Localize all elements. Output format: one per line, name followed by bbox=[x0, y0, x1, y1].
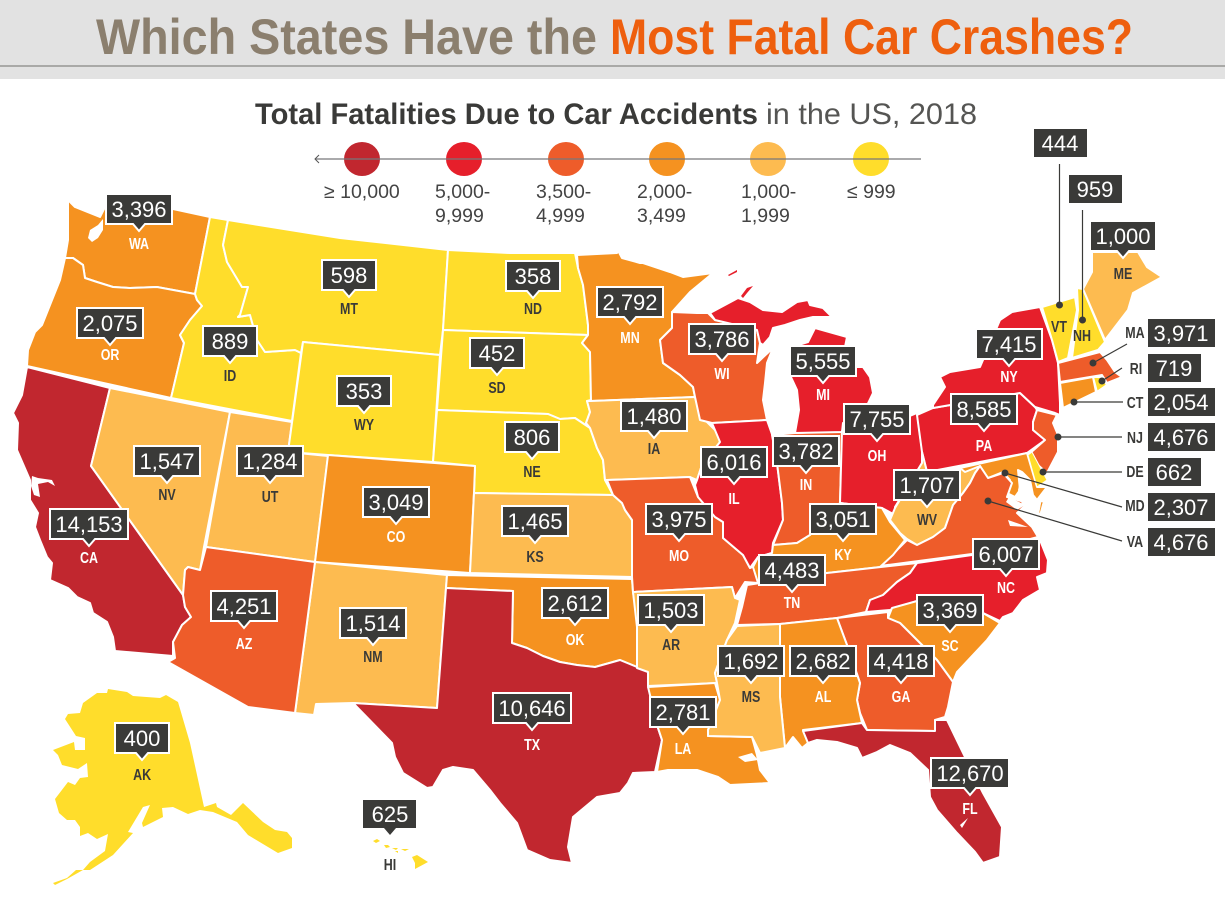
state: Michigan lower peninsula bbox=[790, 328, 873, 433]
state: New York bbox=[933, 307, 1060, 415]
callout: PA: 8,585 bbox=[956, 397, 1012, 422]
callout: HI: 625 bbox=[372, 802, 408, 827]
callout: AK bbox=[115, 723, 169, 784]
callout: NC: NC bbox=[997, 580, 1015, 597]
callout: FL: 12,670 bbox=[936, 761, 1004, 786]
callout: AR: 1,503 bbox=[643, 598, 699, 623]
callout: WA bbox=[106, 194, 172, 253]
state: Idaho bbox=[171, 217, 301, 421]
callout: LA bbox=[650, 697, 716, 758]
callout: IL: 6,016 bbox=[706, 450, 762, 475]
callout: UT: UT bbox=[262, 489, 279, 506]
callout: MS bbox=[718, 646, 784, 706]
callout: WY: WY bbox=[354, 417, 374, 434]
callout: VT: 444 bbox=[1042, 131, 1078, 156]
callout: ND bbox=[506, 261, 560, 318]
state: New Jersey bbox=[1028, 410, 1058, 473]
callout: MA: 3,971 bbox=[1153, 321, 1209, 346]
callout: VA: 4,676 bbox=[1153, 530, 1209, 555]
callout: NE: NE bbox=[523, 464, 541, 481]
callout: MO: MO bbox=[669, 548, 689, 565]
callout: WA: 3,396 bbox=[111, 197, 167, 222]
callout: DE: 662 bbox=[1156, 460, 1192, 485]
callout: MN bbox=[597, 287, 663, 347]
callout: NV: 1,547 bbox=[139, 449, 195, 474]
callout: HI: HI bbox=[384, 857, 396, 874]
callout: NJ: NJ bbox=[1127, 430, 1143, 447]
callout: MI bbox=[790, 346, 856, 404]
legend: 4,999 bbox=[536, 205, 585, 227]
callouts bbox=[50, 129, 1215, 874]
callout: ME: 1,000 bbox=[1095, 224, 1151, 249]
callout: AL bbox=[790, 646, 856, 706]
callout: NY bbox=[976, 329, 1042, 386]
callout: AL: 2,682 bbox=[795, 649, 851, 674]
state: Montana bbox=[223, 220, 448, 355]
callout: OK: OK bbox=[566, 632, 585, 649]
state: California bbox=[13, 367, 191, 656]
callout: AR: AR bbox=[662, 637, 681, 654]
state: Alabama bbox=[780, 618, 862, 748]
state: Tennessee bbox=[737, 563, 917, 625]
callout: OK: 2,612 bbox=[547, 591, 603, 616]
callout: KS: KS bbox=[526, 549, 544, 566]
subtitle: in the US, 2018 bbox=[766, 98, 977, 131]
callout: OR: OR bbox=[101, 347, 120, 364]
header band bbox=[0, 0, 1225, 79]
callout: OK bbox=[542, 588, 608, 649]
state: Pennsylvania bbox=[917, 393, 1045, 472]
callout: TN: TN bbox=[784, 595, 800, 612]
callout: AR bbox=[638, 595, 704, 654]
callout: DE bbox=[1040, 458, 1201, 486]
state: South Dakota bbox=[437, 330, 591, 428]
callout: NH: NH bbox=[1073, 328, 1091, 345]
callout: GA bbox=[868, 646, 934, 706]
state: Nebraska bbox=[433, 410, 613, 495]
callout: NM: 1,514 bbox=[345, 611, 401, 636]
callout: ID: ID bbox=[224, 368, 236, 385]
state: New Mexico bbox=[295, 562, 447, 715]
state: South Carolina bbox=[888, 600, 1000, 682]
state: Georgia bbox=[837, 612, 953, 731]
callout: MD: 2,307 bbox=[1153, 495, 1209, 520]
state: Nevada bbox=[91, 388, 230, 595]
callout: MD bbox=[1002, 470, 1215, 521]
state: Vermont bbox=[1042, 297, 1077, 362]
state: Oklahoma bbox=[446, 575, 637, 667]
state: Wyoming bbox=[288, 342, 440, 462]
state: North Carolina bbox=[866, 540, 1048, 621]
callout: TX: 10,646 bbox=[498, 696, 566, 721]
state: Hawaii bbox=[373, 839, 428, 869]
title: Which States Have the bbox=[96, 9, 597, 65]
callout: MS: MS bbox=[742, 689, 760, 706]
legend: 1,999 bbox=[741, 205, 790, 227]
legend: ≥ 10,000 bbox=[324, 181, 400, 203]
state: Delaware bbox=[1028, 452, 1047, 487]
callout: MN: MN bbox=[620, 330, 640, 347]
callout: FL bbox=[931, 758, 1009, 818]
callout: IA bbox=[621, 401, 687, 458]
callout: NV: NV bbox=[158, 487, 176, 504]
state: Oregon bbox=[27, 258, 202, 398]
callout: KY: KY bbox=[834, 547, 852, 564]
callout: AK: AK bbox=[133, 767, 152, 784]
legend: 9,999 bbox=[435, 205, 484, 227]
state: Minnesota bbox=[577, 245, 713, 401]
callout: AZ bbox=[211, 591, 277, 653]
callout: ND: 358 bbox=[515, 264, 551, 289]
callout: AZ: AZ bbox=[236, 636, 253, 653]
callout: NY: 7,415 bbox=[981, 332, 1037, 357]
callout: MS: 1,692 bbox=[723, 649, 779, 674]
legend bbox=[315, 142, 921, 227]
callout: WY: 353 bbox=[346, 379, 382, 404]
callout: DE: DE bbox=[1126, 464, 1144, 481]
callout: NH bbox=[1069, 175, 1122, 345]
callout: ME bbox=[1090, 221, 1156, 283]
callout: ID: 889 bbox=[212, 329, 248, 354]
legend: 1,000- bbox=[741, 181, 796, 203]
callout: FL: FL bbox=[962, 801, 978, 818]
callout: LA: LA bbox=[675, 741, 691, 758]
legend: 5,000- bbox=[435, 181, 490, 203]
callout: VA: VA bbox=[1127, 534, 1143, 551]
callout: NM: NM bbox=[363, 649, 383, 666]
callout: MT: 598 bbox=[331, 263, 367, 288]
callout: SD bbox=[470, 338, 524, 397]
state: Ohio bbox=[840, 413, 922, 515]
callout: ID bbox=[203, 326, 257, 385]
callout: MA: MA bbox=[1125, 325, 1145, 342]
state: Louisiana bbox=[648, 683, 770, 785]
title bbox=[96, 9, 1133, 65]
callout: IL bbox=[701, 447, 767, 508]
state: Colorado bbox=[315, 455, 475, 573]
callout: KY bbox=[810, 504, 876, 564]
callout: SD: 452 bbox=[479, 341, 515, 366]
callout: CO: 3,049 bbox=[368, 490, 424, 515]
callout: WI: 3,786 bbox=[694, 327, 750, 352]
callout: CA bbox=[50, 509, 128, 567]
subtitle: Total Fatalities Due to Car Accidents bbox=[255, 98, 758, 131]
callout: WI: WI bbox=[714, 366, 730, 383]
callout: AZ: 4,251 bbox=[216, 594, 272, 619]
callout: VT bbox=[1034, 129, 1087, 336]
callout: NJ: 4,676 bbox=[1153, 425, 1209, 450]
callout: SC: 3,369 bbox=[922, 598, 978, 623]
callout: VT: VT bbox=[1051, 319, 1067, 336]
state: Washington bbox=[65, 200, 210, 294]
callout: NC: 6,007 bbox=[978, 542, 1034, 567]
callout: VA bbox=[984, 498, 1215, 556]
callout: CT: CT bbox=[1127, 395, 1144, 412]
legend: 3,499 bbox=[637, 205, 686, 227]
callout: IA: 1,480 bbox=[626, 404, 682, 429]
state: Wisconsin bbox=[660, 312, 773, 423]
callout: TX: TX bbox=[524, 737, 540, 754]
callout: NJ bbox=[1054, 423, 1215, 451]
callout: CO bbox=[363, 487, 429, 546]
callout: NM bbox=[340, 608, 406, 666]
state: Mississippi bbox=[708, 624, 785, 753]
legend: ≤ 999 bbox=[847, 181, 896, 203]
callout: MO: 3,975 bbox=[651, 507, 707, 532]
state: Long Island bbox=[1058, 409, 1083, 422]
callout: OH: 7,755 bbox=[849, 407, 905, 432]
state: Utah bbox=[206, 412, 328, 562]
callout: NH: 959 bbox=[1077, 177, 1113, 202]
state: Massachusetts bbox=[1058, 352, 1122, 383]
callout: MI: MI bbox=[816, 387, 830, 404]
callout: WV: WV bbox=[917, 512, 937, 529]
callout: MA bbox=[1090, 319, 1215, 366]
callout: SC bbox=[917, 595, 983, 655]
map of states bbox=[13, 200, 1162, 885]
callout: NV bbox=[134, 446, 200, 504]
callout: SD: SD bbox=[488, 380, 506, 397]
callout: ME: ME bbox=[1114, 266, 1132, 283]
callout: TN: 4,483 bbox=[764, 558, 820, 583]
callout: NC bbox=[973, 539, 1039, 597]
callout: RI: 719 bbox=[1156, 356, 1192, 381]
state: Illinois bbox=[695, 420, 783, 568]
state: Florida bbox=[803, 720, 1002, 863]
callout: KY: 3,051 bbox=[815, 507, 871, 532]
callout: RI: RI bbox=[1130, 361, 1142, 378]
callout: CA: CA bbox=[80, 550, 98, 567]
callout: IN: 3,782 bbox=[778, 439, 834, 464]
state: Indiana bbox=[772, 431, 842, 545]
callout: LA: 2,781 bbox=[655, 700, 711, 725]
callout: MO bbox=[646, 504, 712, 565]
callout: IN bbox=[773, 436, 839, 494]
state: Maryland bbox=[960, 453, 1047, 500]
state: West Virginia bbox=[890, 452, 980, 545]
callout: CT: 2,054 bbox=[1153, 390, 1209, 415]
legend: 3,500- bbox=[536, 181, 591, 203]
callout: ND: ND bbox=[524, 301, 542, 318]
callout: WV bbox=[894, 470, 960, 529]
callout: GA: 4,418 bbox=[873, 649, 929, 674]
state: Virginia bbox=[880, 466, 1038, 566]
callout: OR bbox=[77, 308, 143, 364]
callout: PA: PA bbox=[976, 438, 992, 455]
legend: 2,000- bbox=[637, 181, 692, 203]
callout: NE bbox=[505, 422, 559, 481]
callout: AL: AL bbox=[815, 689, 832, 706]
callout: IN: IN bbox=[800, 477, 812, 494]
callout: NY: NY bbox=[1000, 369, 1018, 386]
callout: PA bbox=[951, 394, 1017, 455]
state: Rhode Island bbox=[1093, 377, 1107, 392]
callout: IL: IL bbox=[728, 491, 740, 508]
state: Texas bbox=[353, 588, 662, 863]
callout: AK: 400 bbox=[124, 726, 160, 751]
state: North Dakota bbox=[443, 250, 588, 335]
callout: CA: 14,153 bbox=[55, 512, 123, 537]
callout: RI bbox=[1098, 354, 1201, 384]
state: Maine bbox=[1083, 252, 1162, 340]
state: Kansas bbox=[470, 493, 632, 577]
callout: MI: 5,555 bbox=[795, 349, 851, 374]
callout: MT bbox=[322, 260, 376, 318]
callout: WV: 1,707 bbox=[899, 473, 955, 498]
callout: MD: MD bbox=[1125, 498, 1145, 515]
callout: TX bbox=[493, 693, 571, 754]
state: Virginia eastern shore bbox=[1039, 502, 1043, 513]
callout: GA: GA bbox=[892, 689, 910, 706]
state: Arizona bbox=[168, 547, 315, 713]
state: New Hampshire bbox=[1072, 288, 1105, 358]
state: Michigan upper peninsula bbox=[710, 298, 832, 345]
callout: WI bbox=[689, 324, 755, 383]
callout: MN: 2,792 bbox=[602, 290, 658, 315]
callout: SC: SC bbox=[941, 638, 959, 655]
callout: TN bbox=[759, 555, 825, 612]
state: Missouri bbox=[607, 477, 758, 598]
callout: OH bbox=[844, 404, 910, 465]
callout: KS: 1,465 bbox=[507, 509, 563, 534]
callout: OR: 2,075 bbox=[82, 311, 138, 336]
callout: IA: IA bbox=[648, 441, 660, 458]
state: Alaska bbox=[53, 689, 292, 885]
state: Kentucky bbox=[753, 503, 905, 583]
title: Most Fatal Car Crashes? bbox=[610, 9, 1133, 65]
water inlets and small islands bbox=[31, 219, 1030, 828]
callout: UT: 1,284 bbox=[242, 449, 298, 474]
callout: WY bbox=[337, 376, 391, 434]
state: Connecticut bbox=[1060, 377, 1096, 408]
callout: WA: WA bbox=[129, 236, 149, 253]
callout: KS bbox=[502, 506, 568, 566]
callout: HI bbox=[363, 800, 416, 874]
callout: UT bbox=[237, 446, 303, 506]
state: Arkansas bbox=[633, 587, 740, 686]
state: Iowa bbox=[586, 397, 720, 480]
callout: MT: MT bbox=[340, 301, 358, 318]
callout: NE: 806 bbox=[514, 425, 550, 450]
callout: CO: CO bbox=[387, 529, 405, 546]
callout: CT bbox=[1070, 388, 1215, 416]
callout: OH: OH bbox=[868, 448, 886, 465]
